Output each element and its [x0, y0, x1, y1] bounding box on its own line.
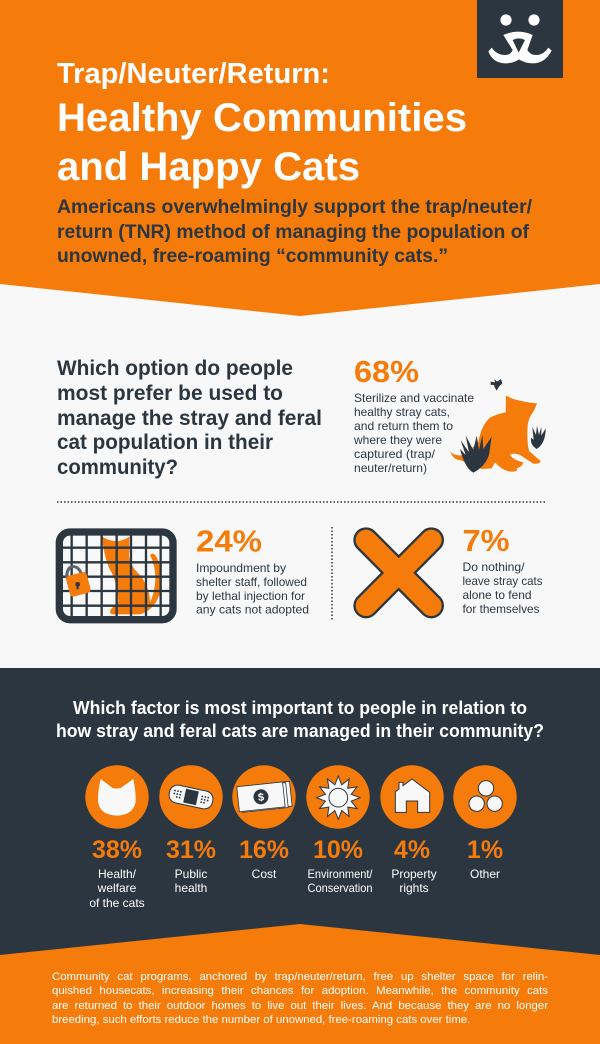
divider: vertical dots [331, 527, 333, 620]
stat: 68 percent: where they were [353, 433, 442, 447]
factors heading: Which factor is most important to people in relation to [73, 698, 527, 718]
footer text: quished housecats, increasing their chances for adoption. Meanwhile, the community cats [52, 985, 548, 997]
question heading: Which option do people [57, 357, 293, 380]
factor: environment: Conservation [308, 881, 372, 895]
question heading: cat population in their [57, 431, 273, 454]
stat: 7 percent: for themselves [462, 602, 540, 616]
logo [477, 0, 563, 78]
factor: environment: 10% [313, 836, 363, 864]
factor: environment [306, 765, 373, 895]
footer text: breeding, such efforts reduce the number of unowned, free-roaming cats over time. [52, 1014, 470, 1026]
stat: 7 percent: Do nothing/ [462, 560, 525, 574]
factor: public health: Public [175, 867, 207, 881]
panel: orange footer [0, 924, 600, 1044]
subtitle: unowned, free-roaming “community cats.” [57, 246, 448, 267]
stat: 7 percent [462, 523, 542, 616]
factor: health of cats: welfare [97, 881, 137, 895]
factor: property rights: rights [399, 881, 429, 895]
factor: property rights: 4% [394, 836, 430, 864]
factor: public health [159, 765, 223, 895]
factors heading [56, 698, 544, 741]
stat: 68 percent: Sterilize and vaccinate [354, 391, 474, 405]
panel: preferred option survey [57, 354, 546, 620]
factor: health of cats: of the cats [89, 896, 145, 910]
factor: other: 1% [467, 836, 503, 864]
stat: 24 percent: any cats not adopted [196, 602, 309, 616]
stat: 68 percent: and return them to [354, 419, 453, 433]
stat: 24 percent: shelter staff, followed [196, 575, 307, 589]
question heading [57, 357, 322, 479]
footer text [52, 970, 552, 1030]
factor: cost: 16% [239, 836, 289, 864]
title [57, 58, 467, 189]
icon: cat in grass with butterfly [450, 379, 546, 473]
factor: cost: Cost [252, 867, 277, 881]
question heading: community? [57, 456, 178, 479]
stat: 7 percent: alone to fend [462, 588, 532, 602]
factor: public health: health [175, 881, 207, 895]
footer text: Community cat programs, anchored by trap/neuter/return, free up shelter space for relin- [52, 971, 548, 983]
stat: 7 percent: 7% [462, 523, 510, 558]
factor: public health: 31% [166, 836, 216, 864]
panel: important factors [0, 668, 600, 958]
stat: 24 percent: Impoundment by [196, 561, 286, 575]
stat: 24 percent: 24% [196, 524, 262, 558]
title: Trap/Neuter/Return: [57, 58, 330, 90]
subtitle: return (TNR) method of managing the population of [57, 222, 530, 243]
title: and Happy Cats [57, 145, 360, 189]
factor: health of cats: 38% [92, 836, 142, 864]
factor: environment: Environment/ [308, 867, 373, 881]
stat: 7 percent: leave stray cats [462, 574, 542, 588]
factor: cost: $ [257, 792, 265, 804]
factor: property rights [380, 765, 444, 895]
factor: other: Other [470, 867, 500, 881]
factor: health of cats [85, 765, 149, 910]
question heading: most prefer be used to [57, 382, 283, 405]
icon: caged cat with padlock [57, 532, 175, 620]
stat: 68 percent: healthy stray cats, [354, 405, 450, 419]
factor: health of cats: Health/ [98, 867, 137, 881]
factor: other [453, 765, 517, 881]
question heading: manage the stray and feral [57, 407, 322, 430]
panel: orange header [0, 0, 600, 316]
icon: orange X [366, 540, 431, 606]
subtitle [57, 197, 533, 267]
stat: 68 percent [353, 354, 474, 475]
stat: 68 percent: captured (trap/ [354, 447, 436, 461]
stat: 68 percent: 68% [354, 354, 419, 389]
title: Healthy Communities [57, 96, 467, 140]
subtitle: Americans overwhelmingly support the trap/neuter/ [57, 197, 533, 218]
stat: 24 percent: by lethal injection for [196, 589, 305, 603]
factors heading: how stray and feral cats are managed in their community? [56, 721, 544, 741]
factor: property rights: Property [391, 867, 437, 881]
footer text: are returned to their outdoor homes to live out their lives. And because they are no longer [52, 1000, 548, 1012]
stat: 24 percent [196, 524, 309, 616]
factor: cost [232, 765, 296, 881]
stat: 68 percent: neuter/return) [354, 461, 427, 475]
divider: horizontal dots [57, 501, 546, 503]
